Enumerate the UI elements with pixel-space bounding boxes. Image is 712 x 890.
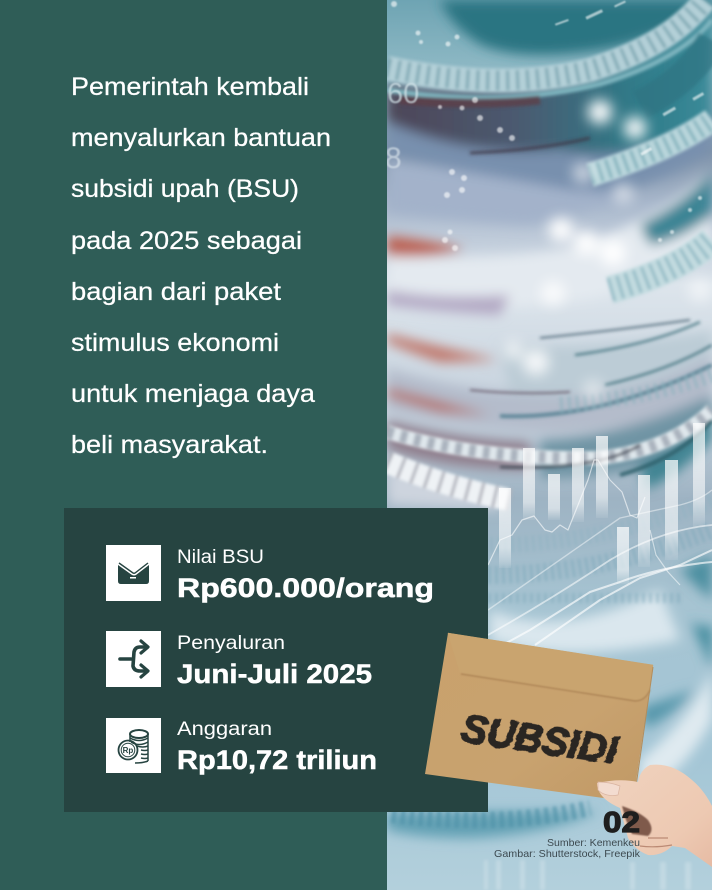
photo: stacked coins with chart overlay: [385, 0, 712, 890]
icon: coins with Rp: [106, 718, 161, 773]
hand holding envelope: [597, 765, 712, 867]
source credits: Gambar: Shutterstock, Freepik: [494, 848, 641, 860]
intro paragraph: Pemerintah kembali: [71, 73, 309, 101]
panel: key facts: [64, 508, 488, 812]
icon: coins with Rp: Rp: [123, 746, 133, 755]
intro paragraph: beli masyarakat.: [71, 431, 268, 459]
chart bars: [499, 423, 705, 584]
envelope with SUBSIDI: SUBSIDI: [459, 706, 621, 773]
number ghosts on coins: 60: [387, 78, 419, 110]
intro paragraph: stimulus ekonomi: [71, 329, 279, 357]
intro paragraph: menyalurkan bantuan: [71, 124, 331, 152]
fact: Penyaluran: Penyaluran: [177, 633, 285, 654]
fact: Nilai BSU: Rp600.000/orang: [177, 573, 434, 603]
intro paragraph: pada 2025 sebagai: [71, 227, 302, 255]
fact: Nilai BSU: [106, 545, 434, 603]
left green background: [0, 0, 387, 890]
faint lower bars: [484, 860, 691, 890]
icon: envelope: [106, 545, 161, 601]
fact: Anggaran: Anggaran: [177, 719, 272, 740]
intro paragraph: [71, 73, 331, 459]
fact: Penyaluran: Juni-Juli 2025: [177, 659, 372, 689]
intro paragraph: bagian dari paket: [71, 278, 281, 306]
source credits: Sumber: Kemenkeu: [547, 837, 640, 849]
intro paragraph: subsidi upah (BSU): [71, 175, 299, 203]
icon: split arrows: [106, 631, 161, 687]
chart line overlay: [488, 460, 712, 652]
envelope with SUBSIDI: [425, 633, 653, 802]
page number: 02: [603, 807, 640, 839]
intro paragraph: untuk menjaga daya: [71, 380, 315, 408]
fact: Anggaran: Rp10,72 triliun: [177, 745, 377, 775]
fact: Penyaluran: [106, 631, 372, 689]
source credits: [494, 837, 641, 860]
photo: stacked coins with chart overlay: 8: [385, 142, 402, 175]
coin edge ridges: [387, 0, 712, 820]
bright specks: [391, 1, 704, 251]
fact: Anggaran: [106, 718, 377, 775]
fact: Nilai BSU: Nilai BSU: [177, 547, 264, 568]
lens glows: [504, 100, 712, 400]
